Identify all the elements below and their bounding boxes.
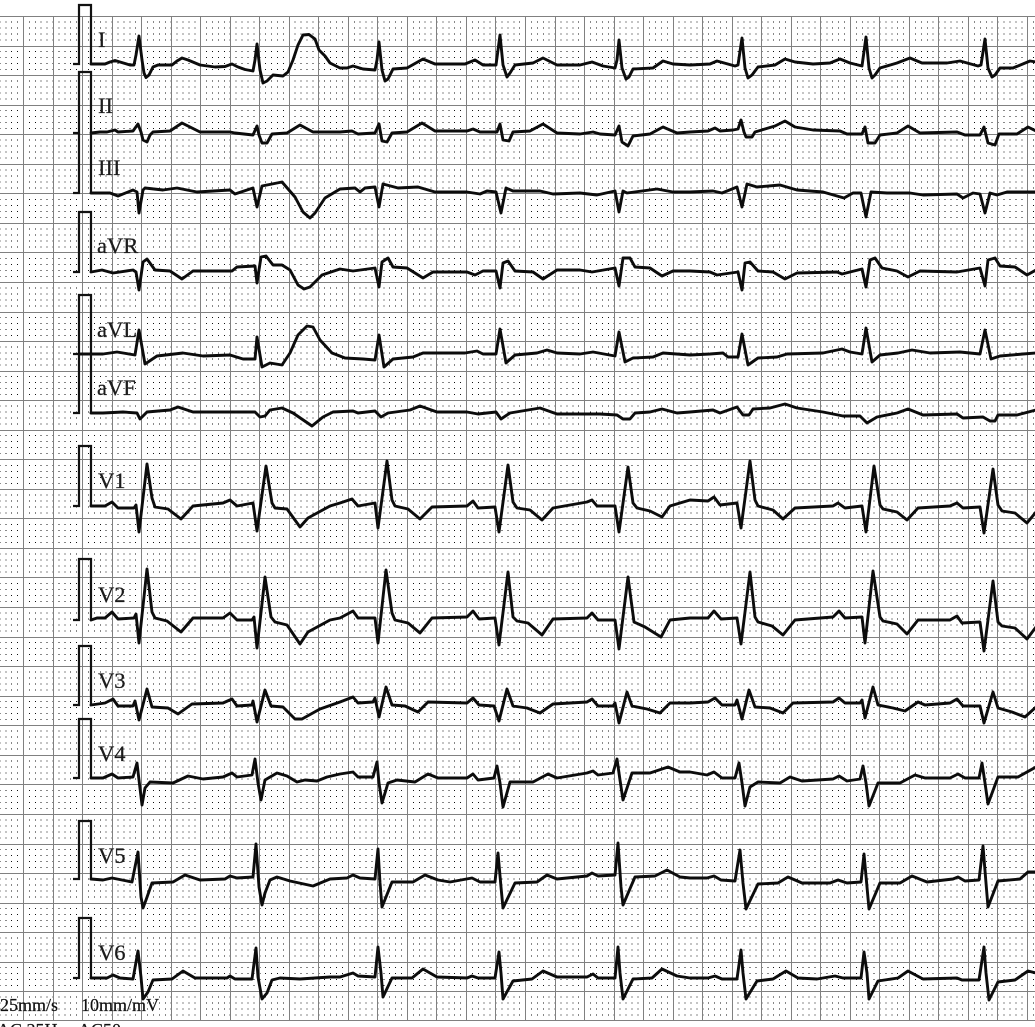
lead label: V6: V6 — [98, 940, 126, 965]
calibration pulse: lead V4 — [73, 719, 91, 778]
lead label: V1: V1 — [98, 468, 126, 493]
lead label: V5: V5 — [98, 843, 126, 868]
trace: lead V1 — [91, 461, 1035, 533]
lead label: I: I — [98, 27, 106, 52]
calibration pulse: lead V5 — [73, 821, 91, 879]
trace: lead V6 — [91, 947, 1035, 1000]
footer: gain: 10mm/mV — [81, 995, 159, 1015]
trace: lead V2 — [91, 569, 1035, 651]
trace: lead I — [91, 34, 1035, 83]
lead label: V3: V3 — [98, 668, 126, 693]
calibration pulse: lead I — [73, 5, 91, 64]
calibration pulse: lead V6 — [73, 918, 91, 978]
calibration pulse: lead II — [73, 72, 91, 133]
calibration pulse: lead aVF — [73, 354, 91, 413]
lead label: V2: V2 — [98, 582, 126, 607]
lead label: aVF: aVF — [97, 375, 136, 400]
trace: lead II — [91, 120, 1035, 146]
trace: lead aVF — [91, 404, 1035, 426]
lead label: III: III — [98, 155, 120, 180]
calibration pulse: lead V3 — [73, 646, 91, 705]
calibration pulse: lead aVR — [73, 212, 91, 272]
calibration pulse: lead III — [73, 133, 91, 193]
calibration pulse: lead V1 — [73, 446, 91, 506]
trace: lead III — [91, 182, 1035, 218]
trace: lead V5 — [91, 843, 1035, 909]
footer: paper speed: 25mm/s — [0, 995, 58, 1015]
trace: lead V3 — [91, 687, 1035, 723]
calibration pulse: lead V2 — [73, 559, 91, 620]
trace: lead aVR — [91, 256, 1035, 290]
lead label: aVR: aVR — [97, 233, 138, 258]
calibration pulse: lead aVL — [73, 295, 91, 354]
trace: lead V4 — [91, 759, 1035, 807]
lead label: aVL: aVL — [97, 317, 137, 342]
lead label: II: II — [98, 93, 113, 118]
lead label: V4: V4 — [98, 741, 126, 766]
trace: lead aVL — [79, 326, 1035, 367]
